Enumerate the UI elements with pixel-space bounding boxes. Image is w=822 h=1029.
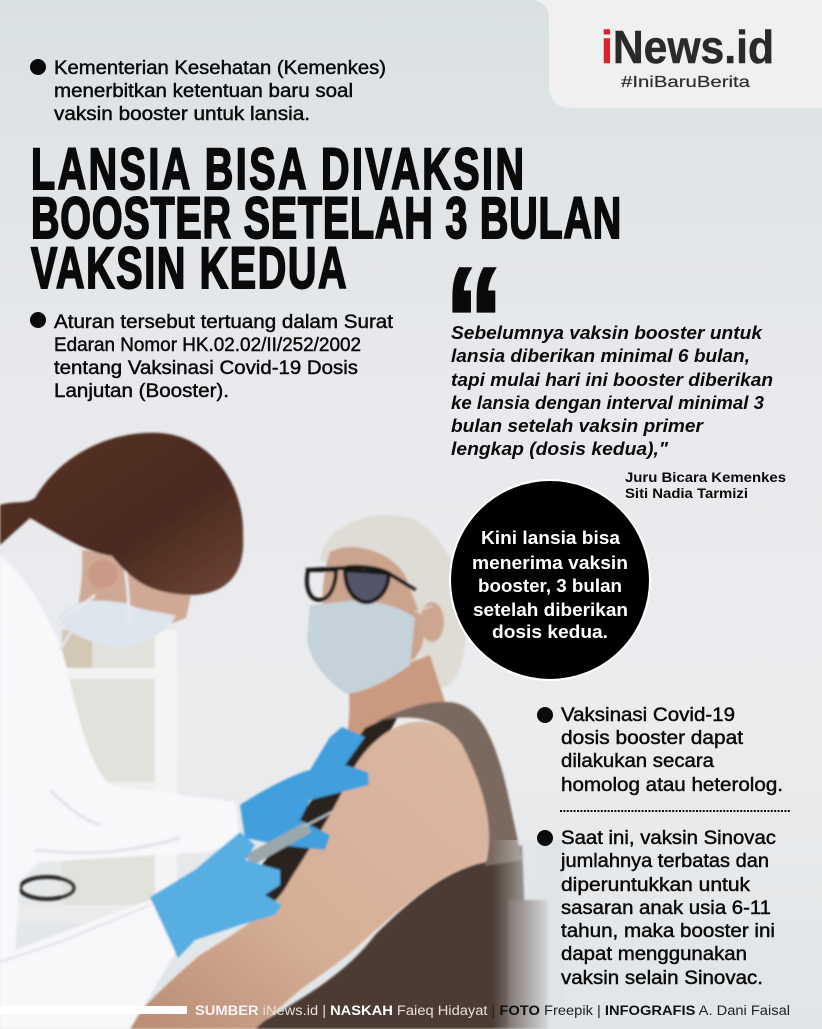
quote attribution: Juru Bicara Kemenkes: [625, 469, 786, 485]
quote: bulan setelah vaksin primer: [451, 415, 705, 436]
text block: regulation: Lanjutan (Booster).: [54, 381, 229, 402]
text block: homolog: homolog atau heterolog.: [561, 775, 783, 796]
text block: regulation: [30, 312, 394, 402]
quote: ke lansia dengan interval minimal 3: [451, 392, 765, 413]
quote: [451, 322, 773, 459]
text block: regulation: Edaran Nomor HK.02.02/II/252/2002: [54, 335, 361, 356]
quote attribution: [625, 469, 786, 501]
callout circle: setelah diberikan: [473, 599, 628, 620]
photo: doctor vaccinating elderly patient: [0, 433, 548, 1029]
icon: quotation mark: “: [445, 236, 503, 404]
text block: sinovac: sasaran anak usia 6-11: [561, 898, 771, 919]
gloves and syringe: [150, 727, 369, 958]
bullet: [30, 59, 46, 75]
quote: Sebelumnya vaksin booster untuk: [451, 322, 764, 343]
text block: intro: menerbitkan ketentuan baru soal: [54, 81, 353, 102]
text block: sinovac: jumlahnya terbatas dan: [560, 851, 769, 872]
text block: intro: [30, 58, 386, 125]
footer credits: SUMBER iNews.id | NASKAH Faieq Hidayat | FOTO Freepik | INFOGRAFIS A. Dani Faisal: [195, 1003, 790, 1018]
text block: intro: Kementerian Kesehatan (Kemenkes): [54, 58, 386, 79]
text block: sinovac: [537, 828, 776, 989]
text block: regulation: Aturan tersebut tertuang dalam Surat: [54, 312, 394, 333]
bullet: [537, 707, 553, 723]
text block: homolog: dilakukan secara: [561, 751, 714, 772]
text block: sinovac: dapat menggunakan: [561, 944, 747, 965]
logo wordmark: iNews.id: [601, 21, 774, 73]
bullet: [537, 830, 553, 846]
text block: sinovac: vaksin selain Sinovac.: [561, 968, 763, 989]
quote: lengkap (dosis kedua),": [451, 438, 668, 459]
text block: sinovac: tahun, maka booster ini: [561, 921, 775, 942]
text block: sinovac: Saat ini, vaksin Sinovac: [561, 828, 776, 849]
doctor: [0, 433, 369, 1029]
logo tagline: #IniBaruBerita: [621, 74, 750, 91]
text block: homolog: [537, 705, 783, 796]
title: LANSIA BISA DIVAKSIN: [31, 136, 524, 202]
callout circle: Kini lansia bisa: [481, 527, 621, 548]
footer bar: [0, 1006, 187, 1014]
text block: homolog: Vaksinasi Covid-19: [561, 705, 735, 726]
shelf cabinet: [10, 630, 177, 923]
text block: regulation: tentang Vaksinasi Covid-19 Dosis: [54, 358, 358, 379]
photo fade: [492, 840, 564, 1029]
callout circle: booster, 3 bulan: [478, 575, 622, 596]
elderly patient: [125, 515, 530, 1029]
quote: lansia diberikan minimal 6 bulan,: [451, 345, 750, 366]
title: VAKSIN KEDUA: [31, 235, 347, 301]
quote attribution: Siti Nadia Tarmizi: [625, 485, 748, 501]
quote: tapi mulai hari ini booster diberikan: [451, 369, 773, 390]
title: [31, 136, 621, 301]
title: BOOSTER SETELAH 3 BULAN: [31, 185, 621, 251]
text block: homolog: dosis booster dapat: [561, 728, 744, 749]
bullet: [30, 312, 46, 328]
callout circle: [450, 480, 650, 680]
logo panel: [530, 0, 822, 108]
callout circle: dosis kedua.: [492, 621, 608, 642]
text block: intro: vaksin booster untuk lansia.: [54, 104, 310, 125]
callout circle: menerima vaksin: [472, 552, 628, 573]
chair: [508, 900, 548, 1029]
text block: sinovac: diperuntukkan untuk: [561, 875, 751, 896]
